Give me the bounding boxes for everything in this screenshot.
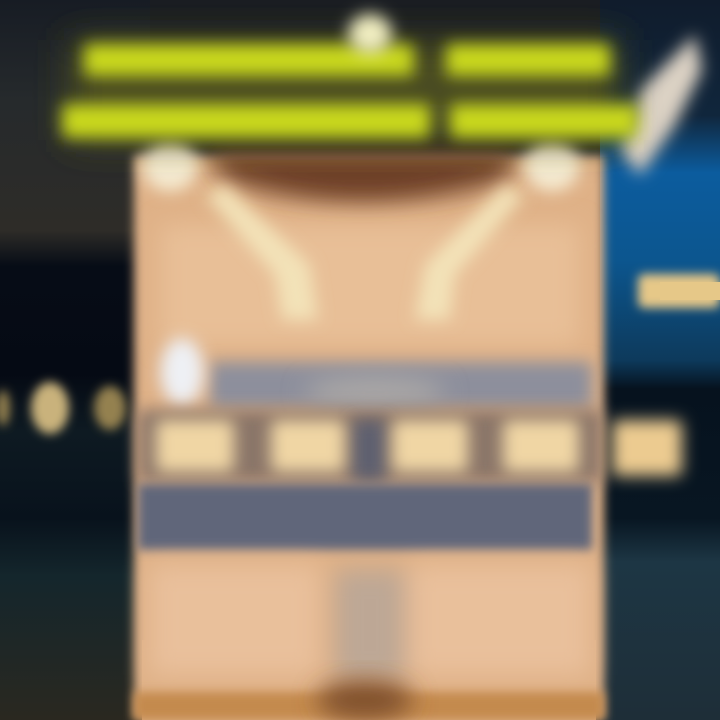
icon: left diagonal beam [205, 185, 318, 320]
box 2 [271, 420, 345, 472]
header band [205, 150, 520, 202]
upper section shading [160, 225, 580, 345]
left side icons [0, 382, 126, 434]
band: lower grey [138, 484, 592, 550]
panel: main board [134, 139, 604, 720]
box 1 [156, 420, 234, 472]
title glow [70, 40, 620, 140]
title line 1 [84, 44, 610, 76]
title [62, 44, 638, 138]
icon: right diagonal beam [415, 185, 525, 320]
band: upper grey [210, 362, 592, 408]
icon: right white wing [620, 35, 702, 175]
icon: white blob [160, 338, 204, 406]
title line 2 [62, 104, 638, 138]
band: middle row [138, 410, 602, 482]
icon: top centre glow [348, 14, 392, 54]
side box right [612, 420, 682, 476]
box 4 [503, 420, 579, 472]
icon: left beam end [142, 139, 198, 191]
right tan bar [638, 274, 720, 308]
box 3 [392, 420, 468, 472]
lower columns [150, 565, 590, 680]
icon: right beam end [524, 139, 580, 191]
footer band [134, 692, 604, 720]
